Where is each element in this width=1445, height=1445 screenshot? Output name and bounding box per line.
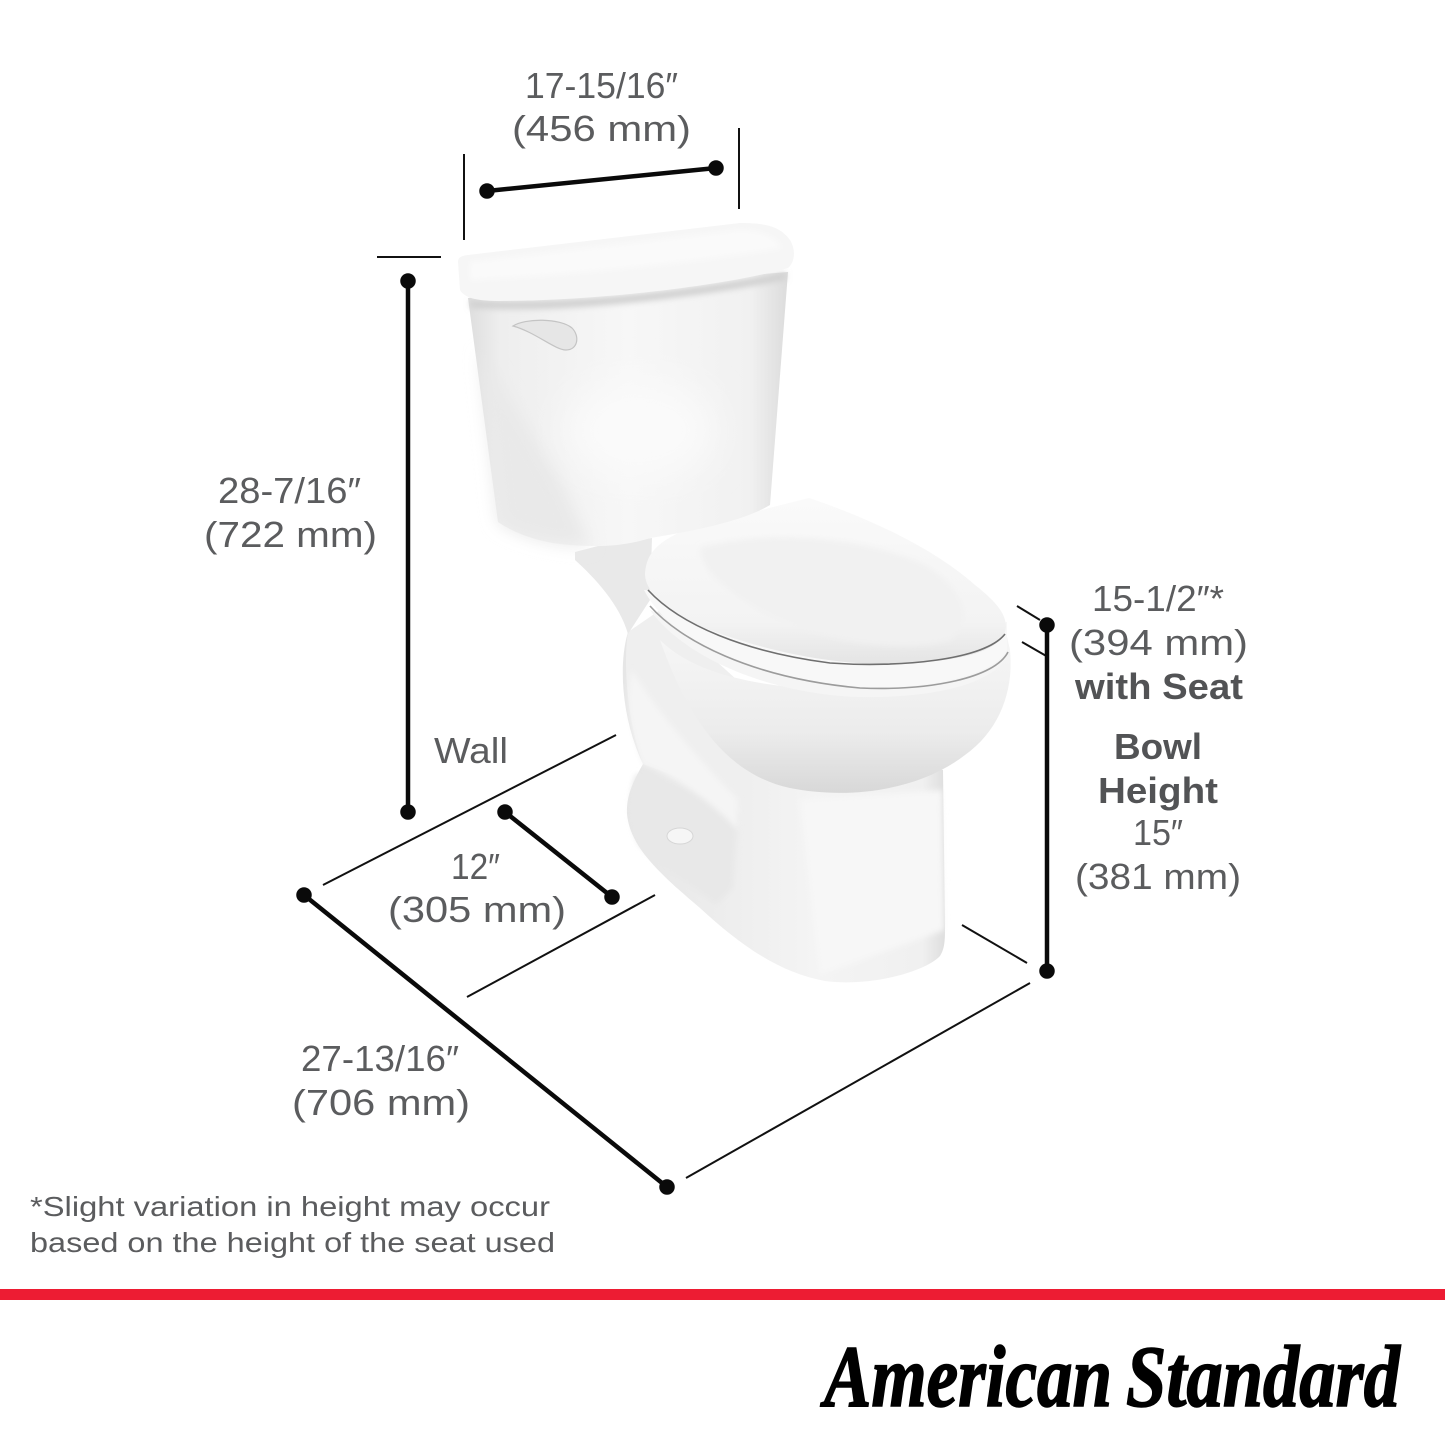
seam line below lid xyxy=(648,590,1005,664)
trapway side shading xyxy=(630,774,738,905)
label: overall depth: 27-13/16″ xyxy=(301,1038,459,1079)
toilet pedestal xyxy=(623,632,945,982)
label: tank width xyxy=(512,65,691,149)
label: rough-in: 12″ xyxy=(451,846,500,887)
dimension: bowl height xyxy=(1042,620,1052,976)
toilet bowl xyxy=(660,640,1011,793)
label: bowl height xyxy=(1075,726,1241,897)
floor bolt cap xyxy=(667,828,693,844)
label: tank width: 17-15/16″ xyxy=(525,65,678,106)
footnote: based on the height of the seat used xyxy=(30,1227,555,1258)
flush handle xyxy=(513,320,577,350)
tank body xyxy=(468,272,788,546)
label: bowl height: Height xyxy=(1098,770,1218,811)
red divider bar xyxy=(0,1289,1445,1300)
footnote xyxy=(30,1191,555,1258)
label: overall height: 28-7/16″ xyxy=(218,470,361,511)
label: bowl height: Bowl xyxy=(1114,726,1202,767)
label: overall height: (722 mm) xyxy=(204,514,377,555)
label: tank width: (456 mm) xyxy=(512,108,691,149)
label: height with seat: (394 mm) xyxy=(1069,622,1248,663)
label: height with seat xyxy=(1069,578,1248,707)
dimension: tank width xyxy=(482,162,722,196)
bowl rim xyxy=(650,610,1010,697)
brand logo xyxy=(820,1329,1402,1426)
seat lid xyxy=(645,498,1006,664)
dimension: rough-in xyxy=(500,806,618,902)
thin extension lines xyxy=(323,128,1048,1178)
back of bowl xyxy=(626,610,770,800)
label: rough-in: (305 mm) xyxy=(388,889,566,930)
label: wall: Wall xyxy=(434,730,508,771)
label: overall depth xyxy=(292,1038,470,1123)
tank lower-left facet xyxy=(480,350,590,546)
label: height with seat: with Seat xyxy=(1074,666,1243,707)
dimension: overall depth xyxy=(298,890,672,1192)
toilet illustration xyxy=(458,223,1011,982)
seam line below ring xyxy=(650,606,1008,688)
tank lid upper highlight xyxy=(470,230,782,280)
footnote: *Slight variation in height may occur xyxy=(30,1191,550,1222)
tank center highlight xyxy=(565,380,715,480)
label: rough-in xyxy=(388,846,566,930)
pedestal front facet xyxy=(800,790,944,975)
tank-to-bowl neck xyxy=(575,538,652,634)
label: bowl height: (381 mm) xyxy=(1075,856,1241,897)
tank lid xyxy=(458,223,794,301)
label: height with seat: 15-1/2″* xyxy=(1092,578,1224,619)
dimension: overall height xyxy=(402,276,414,818)
seat ring xyxy=(644,590,1007,687)
label: bowl height: 15″ xyxy=(1133,812,1183,853)
trapway highlight xyxy=(629,670,738,830)
brand logo: American xyxy=(820,1329,1112,1426)
seat lid inner shading xyxy=(700,538,964,646)
tank lid shadow xyxy=(470,272,786,309)
label: overall height xyxy=(204,470,377,555)
label: overall depth: (706 mm) xyxy=(292,1082,470,1123)
